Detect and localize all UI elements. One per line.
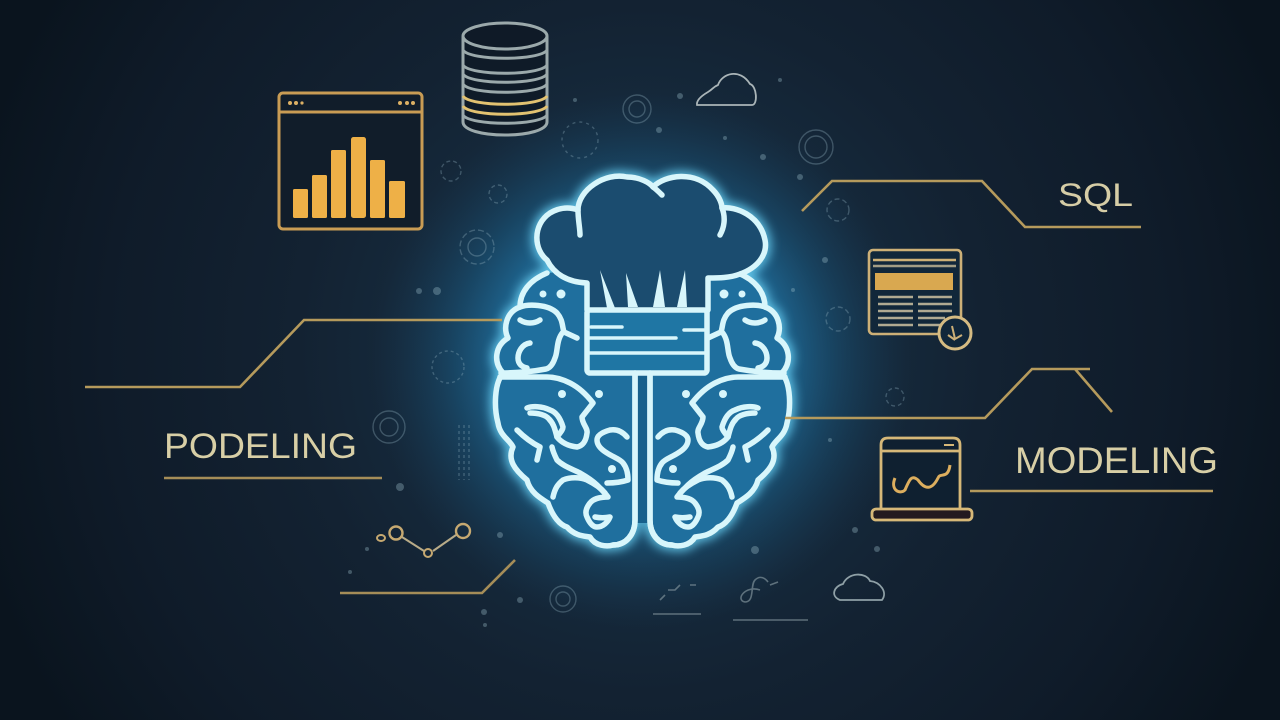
brain glow: [495, 176, 790, 546]
icon: data table document: [869, 250, 971, 349]
label: SQL: SQL: [1058, 177, 1133, 213]
connector: left: [85, 320, 502, 387]
faint bottom sketches: [653, 577, 808, 620]
faint tech icons: [373, 95, 904, 612]
icon: laptop with chart: [872, 438, 972, 520]
connector: lower left: [340, 560, 515, 593]
brain icon: [495, 176, 790, 546]
icon: database cylinder: [463, 23, 547, 135]
connector: top right: [802, 181, 1141, 227]
label: PODELING: PODELING: [164, 427, 357, 466]
icon: line graph: [377, 524, 470, 557]
connector: right: [785, 369, 1112, 418]
faint dots: [348, 78, 907, 627]
icon: cloud top: [697, 74, 756, 105]
brain halo: [372, 90, 912, 630]
label: MODELING: MODELING: [1015, 440, 1218, 481]
icon: cloud bottom: [834, 575, 884, 600]
icon: bar chart window: [279, 93, 422, 229]
